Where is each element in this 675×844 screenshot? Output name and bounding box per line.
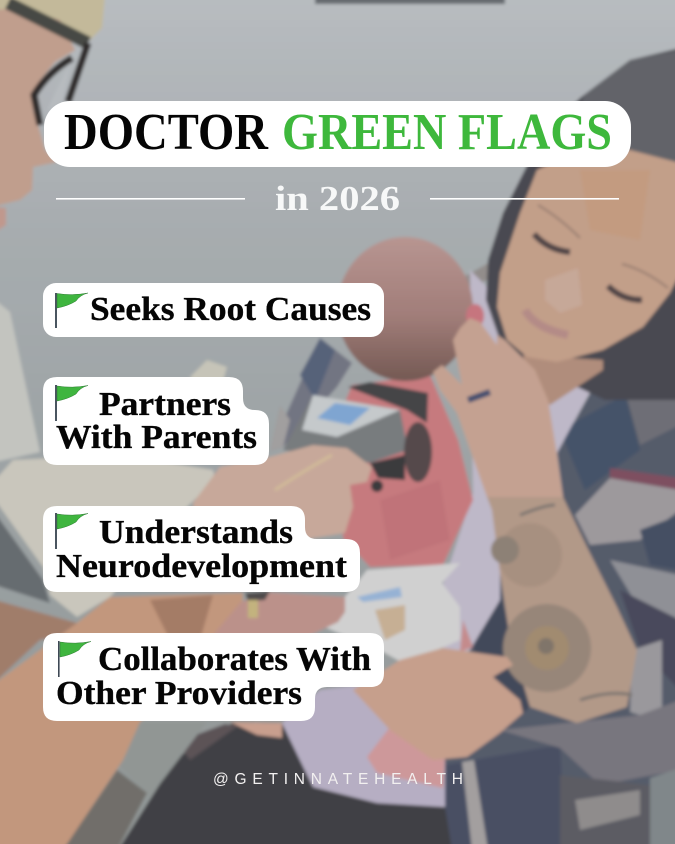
diaper xyxy=(320,563,460,667)
baby foot xyxy=(367,727,445,788)
flag item: Understands Neurodevelopment xyxy=(43,506,360,592)
title: GREEN FLAGS: GREEN FLAGS xyxy=(282,104,612,161)
label: Seeks Root Causes xyxy=(90,291,371,328)
label: Collaborates With xyxy=(98,641,371,678)
tattooed forearm xyxy=(487,497,637,723)
handle: @GETINNATEHEALTH xyxy=(213,771,463,788)
icon: green flag xyxy=(55,385,88,421)
doctor far arm xyxy=(0,600,77,682)
title banner xyxy=(44,101,631,167)
mother hand with ring xyxy=(433,318,563,497)
pants xyxy=(118,722,452,844)
subtitle text: in 2026 xyxy=(275,179,400,218)
scan device xyxy=(348,382,428,423)
flag item: Seeks Root Causes xyxy=(43,283,384,337)
doctor lower hand xyxy=(213,592,345,640)
lilac t-shirt xyxy=(443,270,603,660)
baby back, head, ear xyxy=(338,375,473,567)
doctor near arm xyxy=(0,593,243,844)
mother hair, neck and face xyxy=(486,48,675,400)
label: Understands xyxy=(99,514,293,551)
icon: green flag xyxy=(55,293,88,328)
mother lower hand xyxy=(353,648,523,760)
label line 2: Other Providers xyxy=(56,675,302,712)
icon: green flag xyxy=(55,513,88,549)
title: DOCTOR: DOCTOR xyxy=(64,104,269,161)
icon: green flag xyxy=(58,641,91,677)
doctor fist xyxy=(193,445,372,560)
floor and chair behind arm xyxy=(117,722,207,797)
flannel shirt xyxy=(270,338,352,451)
label line 2: Neurodevelopment xyxy=(56,548,348,585)
label: Partners xyxy=(99,386,231,423)
flag item: Collaborates With Other Providers xyxy=(43,633,384,721)
doctor head xyxy=(0,0,105,45)
label line 2: With Parents xyxy=(56,419,257,456)
flag item: Partners With Parents xyxy=(43,377,269,465)
